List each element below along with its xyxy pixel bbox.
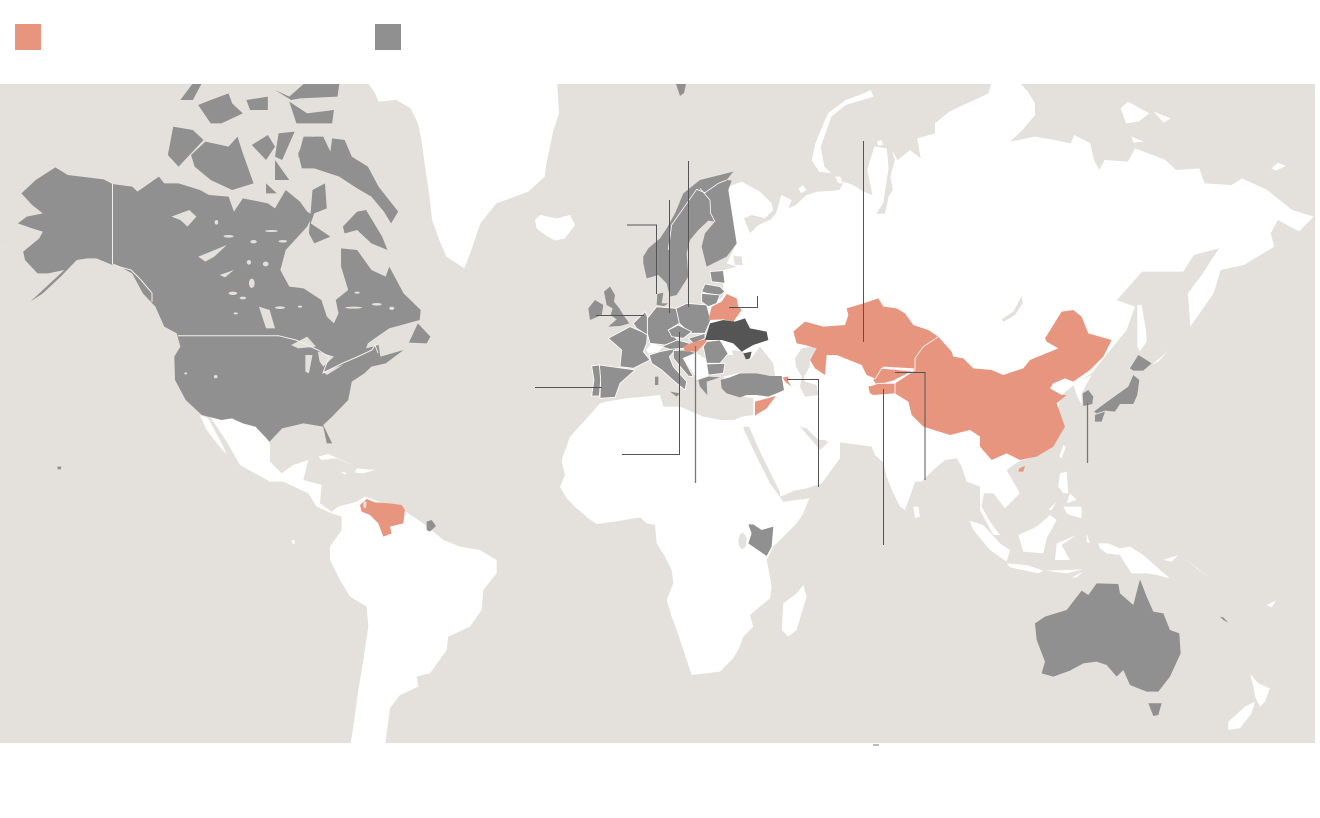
leader: Kyrgyzstan bbox=[895, 372, 925, 480]
Greece bbox=[698, 377, 720, 395]
Benelux bbox=[633, 312, 647, 335]
Hungary bbox=[683, 339, 707, 352]
leader: Kazakhstan bbox=[862, 141, 864, 342]
leader: United Kingdom bbox=[596, 314, 644, 316]
Italy bbox=[649, 348, 687, 390]
Estonia bbox=[710, 271, 725, 283]
Japan bbox=[1094, 355, 1152, 422]
legend bbox=[15, 24, 401, 50]
leader lines bbox=[535, 141, 1088, 545]
Spain bbox=[599, 365, 635, 398]
Lithuania bbox=[702, 293, 720, 307]
Tajikistan bbox=[868, 383, 895, 395]
Latin America bbox=[200, 415, 497, 747]
Syria bbox=[755, 396, 776, 416]
Australia and Tasmania bbox=[1035, 579, 1228, 716]
South Korea bbox=[1083, 390, 1093, 406]
Venezuela bbox=[360, 499, 405, 537]
Canadian lakes and Great Lakes bbox=[172, 210, 396, 378]
leader: Armenia bbox=[787, 380, 818, 487]
leader: South Korea bbox=[1086, 403, 1088, 463]
Bulgaria bbox=[707, 363, 725, 375]
Poland bbox=[676, 303, 711, 333]
Latvia bbox=[702, 284, 725, 295]
Croatia and Slovenia bbox=[673, 350, 697, 377]
Switzerland bbox=[646, 343, 663, 353]
Germany bbox=[647, 307, 679, 345]
leader: Norway bbox=[627, 225, 656, 294]
Kazakhstan bbox=[793, 298, 938, 378]
leader: Hungary bbox=[694, 346, 696, 483]
Svalbard bbox=[676, 84, 686, 96]
France bbox=[608, 327, 650, 368]
China bbox=[895, 310, 1112, 460]
Armenia bbox=[783, 377, 792, 387]
Ukraine bbox=[705, 318, 768, 352]
Arctic islands bbox=[298, 137, 398, 223]
Kyrgyzstan bbox=[873, 368, 913, 385]
Antarctic speck below map bbox=[873, 744, 879, 746]
Iceland bbox=[535, 215, 575, 241]
legend swatch: salmon category bbox=[15, 24, 41, 50]
Southeast Asian and Pacific islands bbox=[782, 305, 1276, 730]
Central Asian borders bbox=[895, 337, 938, 393]
French Guiana bbox=[427, 520, 436, 532]
leader: Sweden bbox=[668, 200, 670, 313]
Slovakia bbox=[688, 333, 705, 343]
sea islands in the Arctic bbox=[799, 90, 1286, 193]
Scandinavian borders bbox=[668, 180, 727, 250]
Madagascar bbox=[782, 585, 807, 637]
leader: Tajikistan bbox=[882, 389, 884, 545]
leader: Spain bbox=[535, 386, 602, 388]
Lake Victoria bbox=[738, 533, 746, 549]
Balkans neutral bbox=[683, 353, 708, 380]
Czechia bbox=[668, 325, 692, 338]
Northern Europe bbox=[643, 172, 737, 306]
Portugal bbox=[592, 365, 601, 396]
North America: USA and Canada bbox=[0, 83, 430, 469]
Lake Maracaibo bbox=[363, 502, 367, 508]
Austria bbox=[662, 340, 690, 349]
North America border lines bbox=[112, 184, 152, 302]
UK bbox=[604, 287, 629, 327]
leader: Czechia bbox=[622, 332, 680, 454]
leader: Belarus bbox=[729, 296, 758, 308]
Central and Southern Europe bbox=[588, 287, 792, 416]
Ireland bbox=[588, 300, 603, 320]
Greenland bbox=[366, 80, 559, 268]
Turkey bbox=[721, 373, 784, 397]
leader: Finland bbox=[688, 161, 690, 307]
neutral land: Eurasia and Africa bbox=[560, 80, 1314, 675]
Scandinavia and Finland bbox=[643, 172, 737, 297]
inland and marginal seas bbox=[723, 152, 1023, 450]
Belarus bbox=[708, 294, 742, 322]
Asia bbox=[793, 298, 1152, 472]
Moldova bbox=[720, 340, 733, 355]
mainland bbox=[18, 167, 421, 443]
Romania bbox=[703, 340, 728, 363]
Denmark bbox=[657, 293, 668, 306]
legend swatch: grey category bbox=[375, 24, 401, 50]
Kenya bbox=[748, 524, 773, 556]
